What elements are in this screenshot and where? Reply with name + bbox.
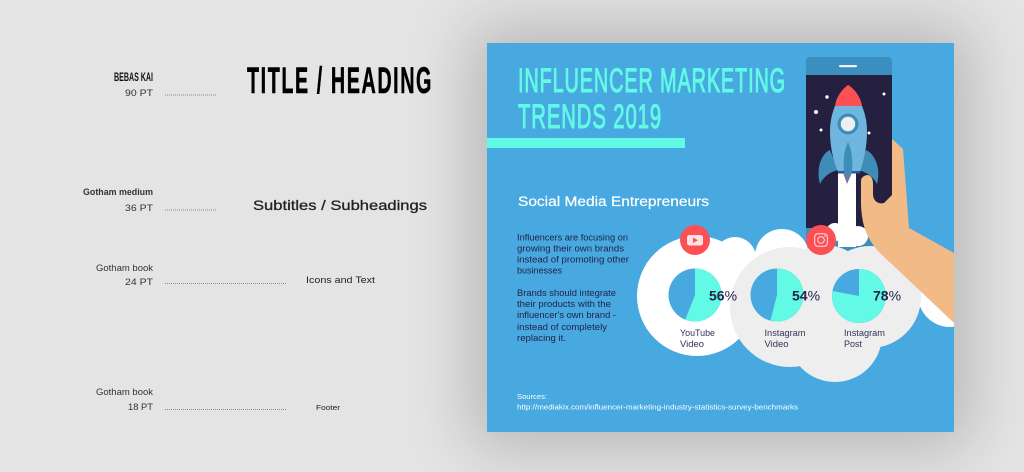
subtitle: Social Media Entrepreneurs <box>518 194 709 209</box>
footer sources <box>517 394 798 411</box>
pie chart: Instagram Video 54%: Instagram <box>764 328 806 338</box>
body text: growing their own brands <box>517 244 625 254</box>
grey cloud: Instagram <box>730 245 921 382</box>
body text: Influencers are focusing on <box>517 232 628 242</box>
body text: replacing it. <box>517 333 566 343</box>
phone <box>806 57 892 252</box>
body text: instead of promoting other <box>517 254 629 264</box>
pie chart: YouTube Video 56%: 56% <box>709 288 737 304</box>
guide row: subtitles: 36 PT <box>125 203 153 214</box>
body text: businesses <box>517 266 562 276</box>
icon: YouTube <box>680 225 710 255</box>
title <box>518 68 784 129</box>
guide row: title: BEBAS KAI <box>114 72 153 84</box>
icon: Instagram <box>806 225 836 255</box>
white cloud behind hand <box>828 174 954 327</box>
title: TRENDS 2019 <box>518 98 662 136</box>
guide row: icons and text: Icons and Text <box>306 275 375 286</box>
pie chart: YouTube Video 56% <box>668 268 737 349</box>
guide row: title: 90 PT <box>125 88 153 99</box>
guide row: footer: Footer <box>316 403 341 412</box>
pie chart: Instagram Post 78%: Post <box>844 339 862 349</box>
title underline bar <box>487 138 685 148</box>
body text: influencer's own brand - <box>517 310 616 320</box>
panel: typography guide <box>83 59 433 413</box>
guide row: subtitles <box>83 187 427 214</box>
title: INFLUENCER MARKETING <box>518 62 786 100</box>
guide row: subtitles: Gotham medium <box>83 187 153 197</box>
hand <box>861 139 954 323</box>
body text <box>517 232 629 343</box>
guide row: subtitles: Subtitles / Subheadings <box>253 197 427 213</box>
rocket <box>819 85 878 184</box>
guide row: footer: Gotham book <box>96 387 154 397</box>
guide row: title: TITLE / HEADING <box>247 59 433 101</box>
guide row: icons and text <box>96 263 375 288</box>
panel: infographic poster <box>487 43 982 432</box>
pie chart: Instagram Post 78%: Instagram <box>844 328 885 338</box>
guide row: footer: 18 PT <box>128 402 153 413</box>
pie chart: Instagram Video 54%: 54% <box>792 288 820 304</box>
pie chart: Instagram Video 54%: Video <box>764 339 788 349</box>
guide row: footer <box>96 387 341 413</box>
body text: Brands should integrate <box>517 288 616 298</box>
white cloud: YouTube <box>637 229 809 356</box>
footer sources: Sources: <box>517 392 547 401</box>
guide row: icons and text: Gotham book <box>96 263 154 273</box>
pie chart: Instagram Post 78% <box>832 269 901 349</box>
footer sources: http://mediakix.com/influencer-marketing-industry-statistics-survey-benchmarks <box>517 402 798 412</box>
guide row: icons and text: 24 PT <box>125 277 153 288</box>
pie chart: YouTube Video 56%: YouTube <box>680 328 715 338</box>
pie chart: Instagram Post 78%: 78% <box>873 288 901 304</box>
guide row: title <box>114 59 433 101</box>
pie chart: Instagram Video 54% <box>750 268 820 349</box>
pie chart: YouTube Video 56%: Video <box>680 339 704 349</box>
body text: their products with the <box>517 299 611 309</box>
body text: instead of completely <box>517 322 608 332</box>
